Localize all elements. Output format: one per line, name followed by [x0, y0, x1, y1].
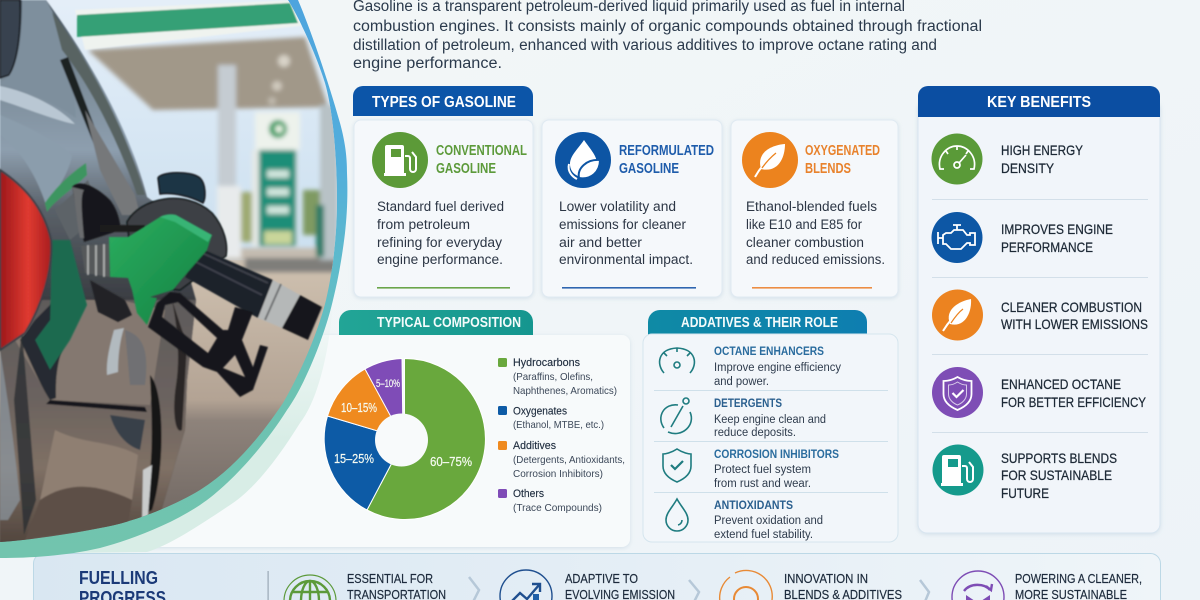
legend: Naphthenes, Aromatics): [513, 385, 617, 397]
item: antioxidants: ANTIOXIDANTS: [714, 500, 793, 512]
card: oxygenated blends: OXYGENATED: [805, 143, 880, 159]
item: detergents: reduce deposits.: [714, 427, 796, 439]
legend: (Ethanol, MTBE, etc.): [513, 419, 604, 431]
item: antioxidants: extend fuel stability.: [714, 529, 813, 541]
item: corrosion inhibitors: CORROSION INHIBITORS: [714, 449, 839, 461]
text: adaptive to evolving emission: [565, 572, 675, 600]
card: conventional gasoline: CONVENTIONAL: [436, 143, 527, 159]
text: essential for transportation: [347, 572, 446, 600]
benefit: cleaner combustion: [932, 290, 1148, 340]
item: antioxidants: [666, 499, 823, 541]
benefit: high energy density: HIGH ENERGY: [1001, 142, 1084, 158]
heading: additives: [648, 310, 867, 335]
item: octane enhancers: Improve engine efficiency: [714, 362, 841, 374]
intro text: distillation of petroleum, enhanced with various additives to improve octane rating and: [353, 37, 937, 54]
card: conventional gasoline: [354, 120, 533, 297]
card: reformulated gasoline: [542, 120, 722, 297]
benefit: cleaner combustion: WITH LOWER EMISSIONS: [1001, 316, 1148, 332]
text: innovation in blends and additives: INNOVATION IN: [784, 572, 868, 586]
green body: [109, 214, 212, 325]
card: oxygenated blends: cleaner combustion: [746, 235, 864, 250]
icon: light bulb: [720, 570, 772, 600]
card: reformulated gasoline: REFORMULATED: [619, 143, 714, 159]
arrow: [469, 577, 479, 600]
legend: Others: [513, 488, 544, 500]
heading: key benefits: [918, 86, 1160, 117]
card: conventional gasoline: Standard fuel derived: [377, 199, 504, 214]
card: conventional gasoline: refining for everyday: [377, 235, 502, 250]
side mirror: [158, 173, 205, 203]
icon: fuel pump: [372, 132, 428, 188]
photo: car being refuelled at a gas station: [0, 0, 347, 558]
legend: (Trace Compounds): [513, 502, 602, 514]
card: oxygenated blends: [731, 120, 898, 297]
legend: Corrosion Inhibitors): [513, 468, 603, 480]
panel: types of gasoline: [353, 86, 898, 297]
heading: typical composition: TYPICAL COMPOSITION: [377, 315, 521, 331]
text: essential for transportation: ESSENTIAL FOR: [347, 572, 433, 586]
card: reformulated gasoline: air and better: [559, 235, 643, 250]
benefit: supports blends: SUPPORTS BLENDS: [1001, 450, 1117, 466]
legend: (Paraffins, Olefins,: [513, 371, 593, 383]
card: reformulated gasoline: emissions for cleaner: [559, 217, 686, 232]
intro text: [353, 0, 982, 72]
fuel nozzle: [109, 214, 322, 397]
hose: [185, 248, 273, 318]
intro text: combustion engines. It consists mainly of organic compounds obtained through fractional: [353, 18, 982, 35]
panel: additives and their role: [643, 310, 898, 542]
item: corrosion inhibitors: Protect fuel system: [714, 464, 811, 476]
pie chart: 60–75%: [430, 454, 472, 469]
item: detergents: DETERGENTS: [714, 398, 782, 410]
text: powering a cleaner, more sustainable: [1015, 572, 1142, 600]
icon: sustainability cycle: [952, 571, 1004, 600]
pie chart: 5–10%: [376, 378, 400, 390]
item: octane enhancers: OCTANE ENHANCERS: [714, 346, 824, 358]
card: conventional gasoline: GASOLINE: [436, 161, 496, 177]
card: oxygenated blends: Ethanol-blended fuels: [746, 199, 877, 214]
tail light: [0, 170, 51, 350]
heading: types of gasoline: TYPES OF GASOLINE: [372, 94, 516, 111]
benefit: supports blends: FUTURE: [1001, 485, 1049, 501]
card: oxygenated blends: and reduced emissions.: [746, 252, 885, 267]
legend: Additives: [513, 440, 556, 452]
pie chart: 15–25%: [334, 451, 374, 466]
benefit: high energy density: [932, 134, 1084, 184]
benefit: cleaner combustion: CLEANER COMBUSTION: [1001, 299, 1142, 315]
heading: typical composition: [339, 310, 533, 335]
arrow: [689, 580, 699, 600]
item: octane enhancers: and power.: [714, 376, 769, 388]
benefit: improves engine performance: IMPROVES ENGINE: [1001, 221, 1113, 237]
intro text: engine performance.: [353, 55, 502, 72]
car body: [0, 0, 196, 545]
benefit: supports blends: [932, 444, 1117, 501]
heading: types of gasoline: [353, 86, 533, 116]
legend: (Detergents, Antioxidants,: [513, 454, 625, 466]
panel: typical composition: [324, 310, 625, 519]
text: innovation in blends and additives: [784, 572, 902, 600]
open fuel door and filler plate: [72, 184, 227, 322]
card: oxygenated blends: like E10 and E85 for: [746, 217, 862, 232]
item: octane enhancers: [660, 346, 841, 388]
trigger guard: [148, 292, 268, 397]
icon: leaf: [742, 132, 798, 188]
legend: [498, 357, 625, 514]
benefit: enhanced octane: ENHANCED OCTANE: [1001, 376, 1121, 392]
dark-green reflection: [35, 240, 87, 370]
icon: drop and leaf: [555, 132, 611, 188]
icon: rising chart: [500, 570, 552, 600]
panel background: composition: [140, 335, 630, 547]
footer heading: FUELLING: [79, 568, 158, 588]
footer heading: [79, 568, 166, 600]
text: adaptive to evolving emission: ADAPTIVE TO: [565, 572, 638, 586]
card: oxygenated blends: BLENDS: [805, 161, 851, 177]
pie chart: [324, 358, 485, 519]
panel: fuelling progress footer: [34, 554, 1160, 600]
item: detergents: Keep engine clean and: [714, 414, 826, 426]
benefit: enhanced octane: [932, 367, 1147, 418]
station background: [0, 0, 345, 550]
heading: additives: ADDATIVES & THEIR ROLE: [681, 315, 838, 331]
heading: key benefits: KEY BENEFITS: [987, 94, 1091, 111]
legend: Oxygenates: [513, 406, 567, 418]
card: conventional gasoline: engine performance.: [377, 252, 503, 267]
card: reformulated gasoline: GASOLINE: [619, 161, 679, 177]
panel: key benefits: [918, 86, 1160, 533]
pie chart: 10–15%: [341, 400, 377, 415]
card: conventional gasoline: from petroleum: [377, 217, 470, 232]
benefit: enhanced octane: FOR BETTER EFFICIENCY: [1001, 394, 1147, 410]
icon: globe: [284, 575, 336, 600]
card: reformulated gasoline: environmental impact.: [559, 252, 693, 267]
text: powering a cleaner, more sustainable: POWERING A CLEANER,: [1015, 572, 1142, 586]
benefit: improves engine performance: [932, 212, 1113, 263]
arrow: [920, 580, 929, 600]
item: detergents: [661, 398, 826, 439]
item: antioxidants: Prevent oxidation and: [714, 515, 823, 527]
card: reformulated gasoline: Lower volatility and: [559, 199, 676, 214]
benefit: high energy density: DENSITY: [1001, 160, 1055, 176]
legend: Hydrocarbons: [513, 357, 580, 369]
item: corrosion inhibitors: from rust and wear.: [714, 478, 811, 490]
benefit: improves engine performance: PERFORMANCE: [1001, 239, 1093, 255]
item: corrosion inhibitors: [663, 449, 839, 490]
benefit: supports blends: FOR SUSTAINABLE: [1001, 467, 1112, 483]
